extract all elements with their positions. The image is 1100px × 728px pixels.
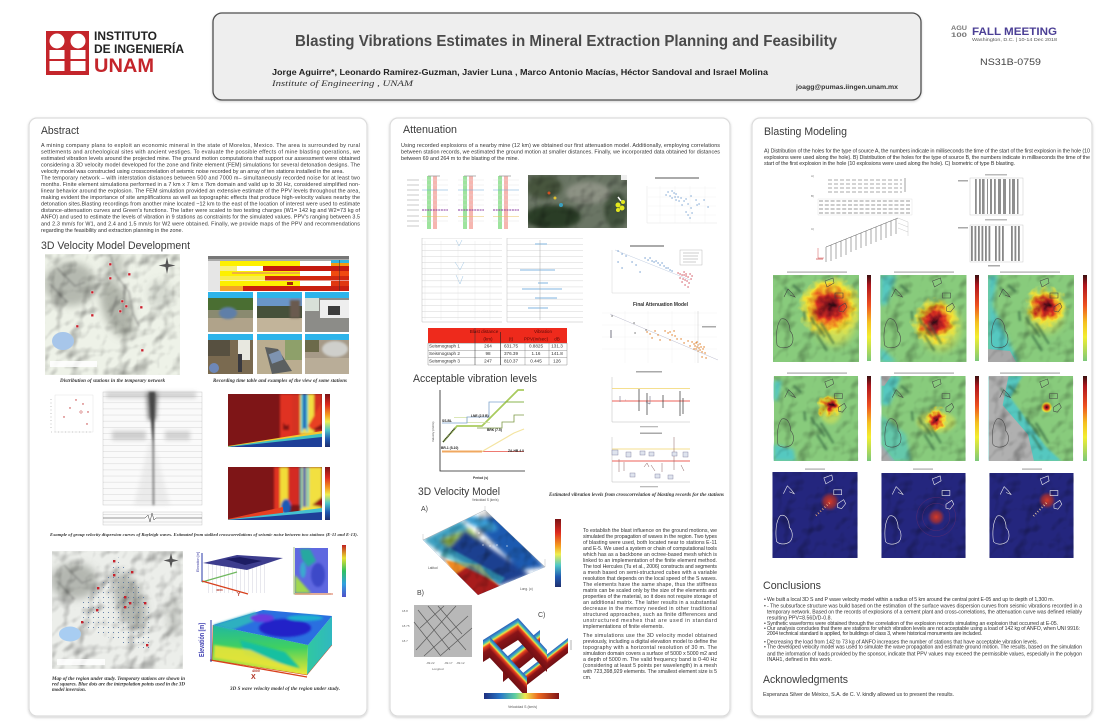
caption: inversion map: red squares. Blue dots are the interpolation points used in the 3D <box>52 682 185 688</box>
model description text: The simulations use the 3D velocity model obtained <box>583 633 717 639</box>
diagram: blast hole layouts <box>811 174 912 262</box>
seismograms with time windows <box>407 176 519 229</box>
colorbar: velocity <box>342 545 346 597</box>
blasting text: start of the first explosion in the hole (10 explosions were used along the hole). C) Isometric of type B blasting. <box>764 161 1015 167</box>
table: blast records: 131.3 <box>551 344 563 348</box>
recording time table <box>208 256 349 291</box>
logo: Instituto de Ingeniería UNAM: UNAM <box>94 56 154 77</box>
heading: Conclusions: Conclusions <box>763 580 821 592</box>
caption: S wave model: 3D S wave velocity model of the region under study. <box>229 687 340 692</box>
map: satellite view of mine <box>528 175 627 228</box>
colorbar: heatmap 1 <box>325 394 330 447</box>
scatter chart: combined records <box>612 245 702 293</box>
cross-section fence diagram C <box>483 618 571 698</box>
abstract text <box>41 143 360 234</box>
AGU Fall Meeting logo: 100 <box>951 32 968 39</box>
heatmap: group velocity dispersion 2 <box>228 467 322 520</box>
table: blast records: Seismograph 1 <box>429 344 460 348</box>
model description text: previously, including a digital elevation model to define the <box>583 639 717 645</box>
caption: inversion map: model inversion. <box>52 688 86 693</box>
session code: NS31B-0759 <box>980 57 1041 67</box>
conclusions list: Decreasing the load from 142 to 73 kg of ANFO increases the number of stations that have acceptable vibration levels. <box>767 640 1038 646</box>
chart: vibration levels, station 2 <box>612 432 690 487</box>
chart: acceptable vibration levels <box>431 390 525 480</box>
table: blast records: 810.37 <box>504 358 518 364</box>
model description text: The elements have the same shape, thus the stiffness <box>583 582 717 588</box>
caption: dispersion curves: Example of group velocity dispersion curves of Rayleigh waves. Estimated from stalked crosscorrelations of seismic noise between two stations (E-11 and E-13). <box>49 532 358 537</box>
relief map B: 18.8 <box>402 609 408 613</box>
conclusions list: • <box>764 621 766 627</box>
model description text: structured approaches, such as finite differences and <box>583 612 717 618</box>
abstract text: ANFO) and used to estimate the levels of vibration in 9 stations as constraints for the simulated values. PPV's ranging between 3.5 <box>41 215 360 221</box>
abstract text: months. Finite element simulations performed in a 7 km x 7 km x 7km domain and valid up to 30 Hz, considered simplified non- <box>41 182 360 188</box>
3D mesh with interpolation points: 4000 <box>216 588 223 592</box>
table: blast records: 1.16 <box>532 351 541 356</box>
logo: Instituto de Ingeniería UNAM: INSTITUTO <box>94 29 157 43</box>
relief map B: Longitud <box>432 667 444 671</box>
3D mesh with interpolation points: Y <box>237 592 241 598</box>
abstract text: considering a 3D velocity model developed for the zone and finite element (FEM) simulations for several detonation designs. The <box>41 163 360 169</box>
table: blast records: Seismograph 2 <box>429 351 460 356</box>
model description text: an additional matrix. The latter results in a substantial <box>583 600 717 606</box>
model description text: matrix can be scaled only by the size of the elements and <box>583 588 717 594</box>
conclusions list: 2004 technical standard is applied, for buildings of class 3, where historical monuments are included. <box>767 631 982 637</box>
PPV map: row 2, column 2 <box>880 376 966 461</box>
3D mesh with interpolation points: Elevation [m] <box>196 552 200 572</box>
model description text: simulated the propagation of waves in the region. Two types <box>583 534 717 540</box>
abstract text: detonation sites.Blasting recordings from another mine located ~12 km to the east of the location of interest were used to estimate <box>41 202 360 208</box>
chart: acceptable vibration levels: BR-1 (5-10) <box>441 446 458 450</box>
table: blast records <box>428 328 567 365</box>
relief map B <box>402 605 472 671</box>
heading: Acknowledgments: Acknowledgments <box>763 674 848 686</box>
heading: Attenuation: Attenuation <box>403 124 457 136</box>
model description text: and E-5. We used a system or chain of computational tools <box>583 546 717 552</box>
diagram: blast hole layouts: B) <box>811 194 814 198</box>
conclusions list: • <box>764 645 766 651</box>
model description text: of blasting were used, both located near to stations E-11 <box>583 540 717 546</box>
abstract text: linear behavior around the explosion. The FEM simulation provided an extensive estimate of the PPV levels throughout the area, <box>41 189 360 195</box>
conclusions list: • <box>764 640 766 646</box>
model description text: topography with a horizontal resolution of 30 m. The <box>583 645 717 651</box>
table: blast records: 98 <box>485 351 491 356</box>
3D mesh with interpolation points <box>196 552 283 598</box>
table: blast records: 264 <box>484 344 492 348</box>
table: blast records: 0.8825 <box>529 344 543 348</box>
logo: Instituto de Ingeniería UNAM <box>46 29 184 77</box>
caption: inversion map <box>51 677 185 693</box>
AGU Fall Meeting logo: AGU <box>951 25 967 32</box>
chart: acceptable vibration levels: BRK (7.5) <box>487 428 502 432</box>
chart: acceptable vibration levels: LNE (2.5 B) <box>471 414 489 418</box>
table: blast records: dB <box>554 336 560 342</box>
3D surface velocity model: Velocidad S (km/s) <box>472 498 499 502</box>
conclusions list: Synthetic waveforms were obtained through the correlation of the explosion records simulating an explosion that occurred at E-05. <box>767 621 1058 627</box>
abstract text: The temporary network – with interstation distances between 500 and 7000 m– simultaneously recorded noise for at least two <box>41 176 360 182</box>
relief map B: -99.22 <box>426 661 435 665</box>
model description text <box>583 528 718 681</box>
attenuation text <box>401 143 720 162</box>
colorbars and map axis marks <box>787 272 1087 470</box>
colorbar: C <box>484 693 559 709</box>
model description text: properties of the material, so it does not require storage of <box>583 594 718 600</box>
diagram: blast hole layouts: C) <box>811 227 814 231</box>
conclusions list: Our analysis concludes that there are stations for which vibration levels are not acceptable using a load of 142 kg of ANFO, when UNI 9916: <box>767 626 1080 632</box>
chart: source B pulses <box>958 219 1023 266</box>
heading: 3D Velocity Model Development: 3D Velocity Model Development <box>41 240 190 252</box>
title: Blasting Vibrations Estimates in Mineral Extraction Planning and Feasibility <box>295 33 837 50</box>
scatter chart: final attenuation <box>602 311 718 363</box>
conclusions list: and the information of loads provided by the sponsor, indicate that PPV values may exceed the permissible values, especially in the polygon <box>767 651 1082 657</box>
abstract text: estimated vibration levels around the projected mine. The ground motion computations that support our assessment were obtained <box>41 156 360 162</box>
table: blast records: 631.75 <box>504 344 518 348</box>
PPV map: row 1, column 1 <box>773 275 859 362</box>
abstract text: making evident the importance of site amplifications as well as topographic effects that produce high-velocity values nearby the <box>41 195 360 201</box>
3D surface velocity model: Latitud <box>428 566 438 570</box>
attenuation text: Using recorded explosions of a nearby mine (12 km) we obtained our first attenuation model. Additionally, employing correlations <box>401 143 720 149</box>
conclusions list: resulting PPV=8.56D/D-0.8. <box>767 615 832 621</box>
model description text: (considering at least 5 points per wavelength) in a mesh <box>583 663 717 669</box>
PPV map: row 1, column 2 <box>880 275 966 362</box>
model description text: decrease in the memory needed in other traditional <box>583 606 717 612</box>
chart: acceptable vibration levels: SS-BL <box>442 419 452 423</box>
conclusions list: • <box>764 597 766 603</box>
table: blast records: 376.39 <box>504 351 518 356</box>
PPV map: row 2, column 1 <box>773 376 858 461</box>
blasting text: A) Distribution of the holes for the type of source A, the numbers indicate in milliseconds the time of the start of the first explosion in the hole (10 <box>764 148 1090 154</box>
label C: C) <box>538 612 545 619</box>
conclusions list <box>764 597 1082 663</box>
label B: B) <box>417 590 424 597</box>
heading: Abstract: Abstract <box>41 125 79 137</box>
table: blast records: (km) <box>483 336 493 342</box>
table: blast records: (t) <box>509 336 514 342</box>
abstract text: settlements and archeological sites with ancient vestiges. To evaluate the possible effects of mine blasting operations, we <box>41 150 360 156</box>
conclusions list: • <box>764 604 766 610</box>
abstract text: distance-attenuation curves and Green's functions. The latter were scaled to two testing charges (W1= 142 kg and W2=73 kg of <box>41 208 360 214</box>
conclusions list: We built a local 3D S and P wave velocity model within a radius of 5 km around the central point E-05 and up to depth of 1,300 m. <box>767 597 1054 603</box>
conclusions list: INAH1, defined in this work. <box>767 657 832 663</box>
panel: right column <box>752 118 1092 716</box>
inset: velocity slice <box>294 547 333 594</box>
conclusions list: - The subsurface structure was build based on the estimation of the surface waves dispersion curves from seismic vibrations recorded in a <box>767 604 1082 610</box>
map: distribution of stations <box>45 254 180 375</box>
inset: station pair locations <box>51 395 93 432</box>
table: blast records: PPV(in/sec) <box>524 336 549 342</box>
table: blast records: Seismograph 3 <box>429 358 460 364</box>
panel: middle column <box>390 118 730 716</box>
attenuation text: between station records, we estimated the ground motion at smaller distances. Finally, we incorporated data obtained for distances <box>401 150 720 156</box>
caption: estimated vibration levels: Estimated vibration levels from crosscorrelation of blasting records for the stations <box>548 493 724 498</box>
colorbar: A <box>555 519 561 587</box>
relief map B: 18.75 <box>402 624 410 628</box>
abstract text: velocity model was constructed using crosscorrelation of seismic noise recorded by an array of ten stations installed in the area. <box>41 169 344 175</box>
model description text: linked to an implementation of the finite element method. <box>583 558 717 564</box>
PPV map: row 1, column 3 <box>988 275 1074 362</box>
table: blast records: Blast distance <box>470 329 499 334</box>
blasting text <box>764 148 1090 167</box>
3D S wave velocity block: Elevatión [m] <box>197 623 206 657</box>
PPV map: row 3, column 2 <box>881 473 966 558</box>
label A: A) <box>421 506 428 513</box>
model description text: implementations of finite elements. <box>583 624 664 630</box>
colorbar: C: Velocidad S (km/s) <box>508 705 537 709</box>
caption: inversion map: Map of the region under study. Temporary stations are shown in <box>51 677 185 682</box>
3D S wave velocity block: X <box>251 674 256 681</box>
caption: stations map: Distribution of stations in the temporary network <box>59 379 166 384</box>
model description text: To establish the blast influence on the ground motions, we <box>583 528 717 534</box>
contact email: joagg@pumas.iingen.unam.mx <box>795 85 899 91</box>
affiliation: Institute of Engineering , UNAM <box>271 78 414 88</box>
chart: stacked crosscorrelations <box>103 392 202 525</box>
diagram: blast hole layouts: A) <box>811 174 814 178</box>
panel: left column <box>29 118 367 716</box>
abstract text: regarding the feasibility and extraction planning in the zone. <box>41 228 183 234</box>
relief map B: -99.12 <box>456 661 465 665</box>
title banner <box>213 13 921 100</box>
model description text: with 723,398,929 elements. The smallest element size is 5 <box>583 669 717 675</box>
authors: Jorge Aguirre*, Leonardo Ramirez-Guzman, Javier Luna , Marco Antonio Macías, Héctor Sandoval and Israel Molina <box>272 67 768 77</box>
abstract text: A mining company plans to exploit an economic mineral in the state of Morelos, Mexico. The area is surrounded by rural <box>41 143 360 149</box>
model description text: which has as a backbone an octree-based mesh which is <box>583 552 717 558</box>
heading: Blasting Modeling: Blasting Modeling <box>764 126 847 138</box>
chart: vibration levels, station 1 <box>612 371 690 427</box>
relief map B: -99.17 <box>444 661 453 665</box>
3D S wave velocity block: 4000 <box>252 669 260 673</box>
AGU Fall Meeting logo: FALL MEETING <box>972 26 1057 38</box>
heading: Final Attenuation Model: Final Attenuation Model <box>633 302 688 308</box>
station photos <box>208 292 349 374</box>
acknowledgments text: Esperanza Silver de México, S.A. de C. V. kindly allowed us to present the results. <box>763 692 954 698</box>
chart: source A pulses <box>958 174 1023 215</box>
heading: 3D Velocity Model: 3D Velocity Model <box>418 486 500 498</box>
conclusions list: The developed velocity model was used to simulate the wave propagation and estimate ground motion. The results, based on the simulation <box>767 645 1082 651</box>
table: blast records: Vibration <box>534 329 552 334</box>
model description text: a depth of 5000 m. The valid frequency band is 0-40 Hz <box>583 657 717 663</box>
PPV map: row 2, column 3 <box>988 376 1074 461</box>
table: blast records: 141.8 <box>551 351 563 356</box>
model description text: simulation domain covers a surface of 5000 x 5000 m2 and <box>583 651 717 657</box>
heatmap: group velocity dispersion 1 <box>228 394 322 447</box>
3D S wave velocity block <box>197 610 332 681</box>
caption: recording table and photos: Recording time table and examples of the view of some stations <box>213 379 347 384</box>
scatter chart: observations vs distance <box>647 177 717 223</box>
PPV map: row 3, column 3 <box>989 473 1074 558</box>
model description text: a mesh based on semi-structured cubes with a variable <box>583 570 717 576</box>
map: inversion interpolation points <box>52 551 183 669</box>
conclusions list: • <box>764 626 766 632</box>
colorbar: heatmap 2 <box>325 467 330 520</box>
table: blast records: 247 <box>484 358 492 364</box>
PPV map: row 3, column 1 <box>772 472 858 558</box>
model description text: unstructured meshes that are used in standard <box>583 618 717 624</box>
chart: acceptable vibration levels: Velocity (mm/s) <box>431 421 435 442</box>
AGU Fall Meeting logo: Washington, D.C. | 10-14 Dec 2018 <box>972 37 1058 42</box>
model description text: cm. <box>583 675 591 681</box>
table: blast records: 0.445 <box>530 358 542 364</box>
heading: Acceptable vibration levels: Acceptable vibration levels <box>413 373 537 385</box>
chart: acceptable vibration levels: Period (s) <box>473 476 488 480</box>
table: blast records: 126 <box>553 358 561 364</box>
seismogram section B <box>507 238 583 322</box>
3D surface velocity model: Long. (o) <box>520 587 533 591</box>
attenuation text: between 69 and 264 m to the blasting of the mine. <box>401 156 519 162</box>
logo: Instituto de Ingeniería UNAM: DE INGENIERÍA <box>94 41 184 56</box>
3D surface velocity model <box>423 498 548 600</box>
seismogram section A <box>422 238 502 322</box>
relief map B: 18.7 <box>402 639 408 643</box>
model description text: resolution that depends on the local speed of the S waves. <box>583 576 717 582</box>
abstract text: and 2.3 mm/s for W1, and 2.4 and 1.5 mm/s for W2 were obtained. Finally, we provide maps of the PPV and recommendations <box>41 221 360 227</box>
chart: acceptable vibration levels: ZA-HB-4.0 <box>508 449 524 453</box>
model description text: The tool Hercules (Tu et al., 2006) constructs and segments <box>583 564 717 570</box>
conclusions list: temporary network. Based on the records of explosions of a cement plant and cross-correlations, the attenuation curve was defined reliably <box>767 610 1082 616</box>
AGU Fall Meeting logo <box>951 25 1058 42</box>
blasting text: explosions were used along the hole). B) Distribution of the holes for the type of source B, the numbers indicate in milliseconds the time of the <box>764 155 1090 161</box>
